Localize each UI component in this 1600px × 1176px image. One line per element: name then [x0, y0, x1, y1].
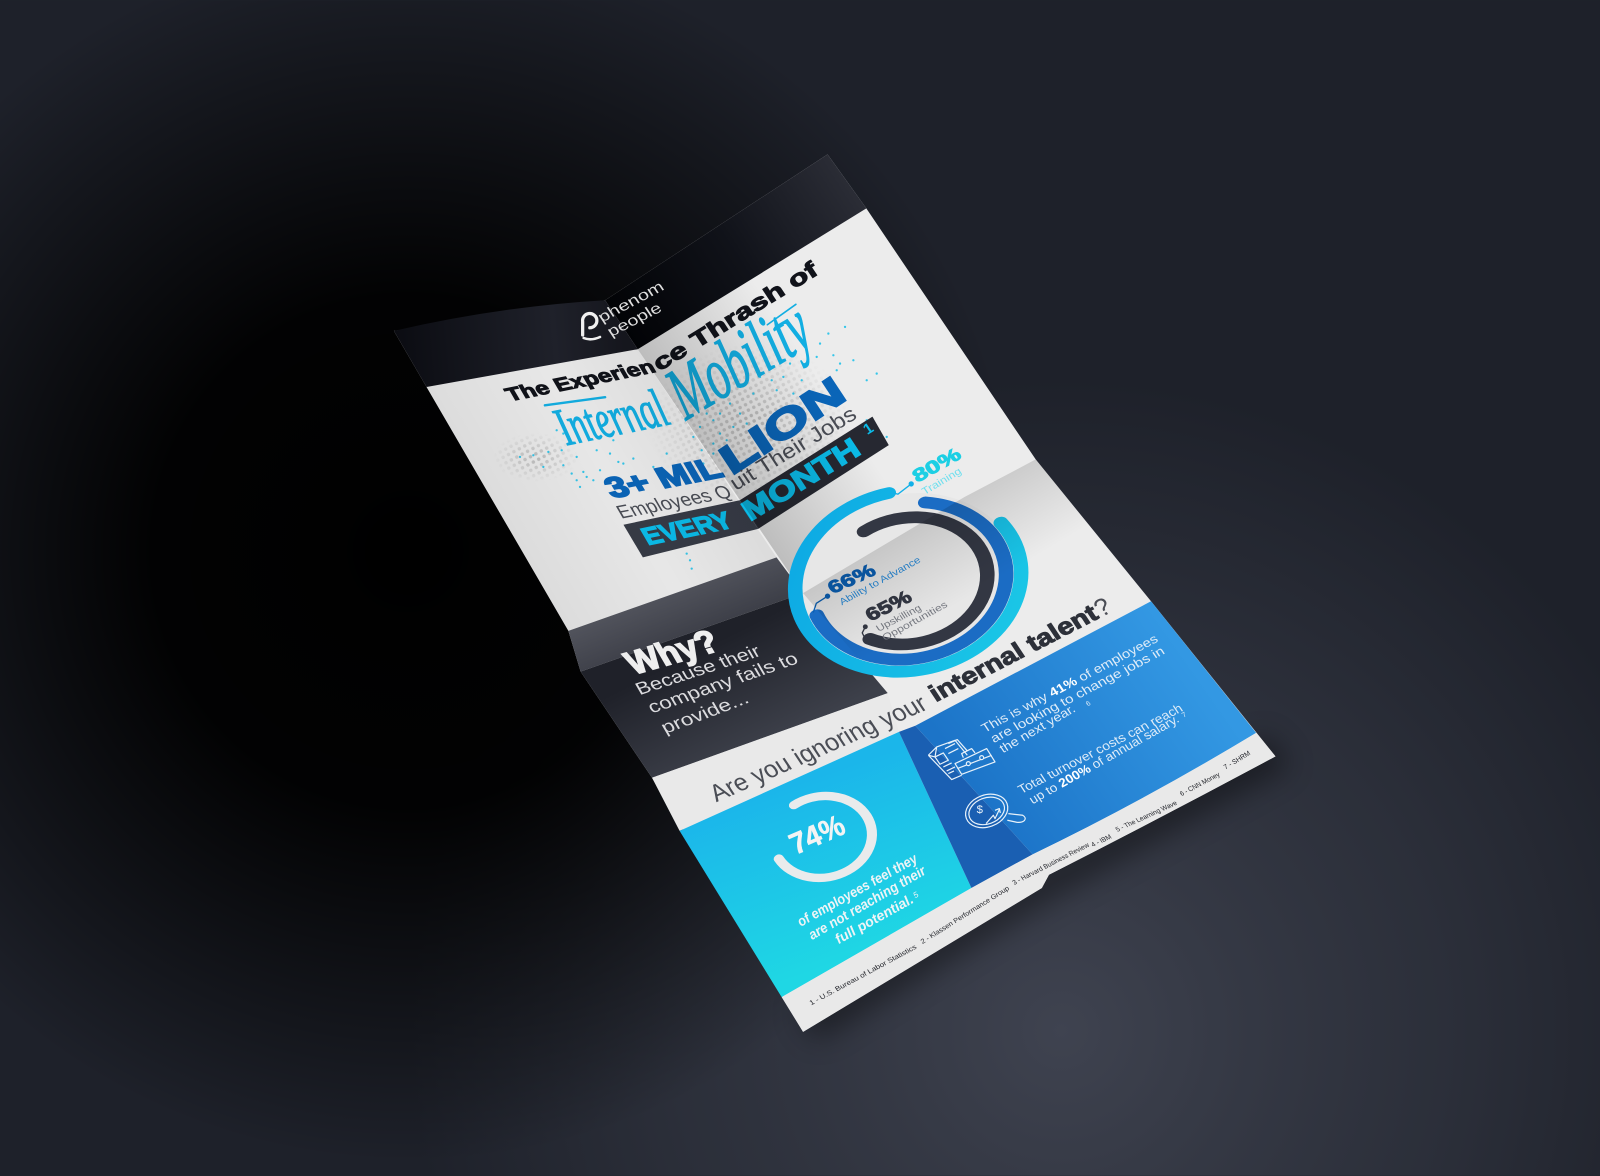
- source list: 4 - IBM: [1090, 834, 1113, 849]
- question left text: Are you ignoring your: [704, 690, 933, 807]
- source list: 6 - CNN Money: [1179, 771, 1222, 798]
- header band: right: [605, 154, 866, 349]
- source list: 5 - The Learning Wave: [1115, 800, 1179, 834]
- circular chart: [755, 443, 1061, 707]
- label training: Training: [920, 466, 964, 498]
- top-left panel shading: [427, 349, 777, 631]
- script heading: Mobility: Mobility: [652, 285, 825, 436]
- why heading: Why?: [619, 624, 726, 682]
- label ability to advance: Ability to Advance: [837, 555, 923, 608]
- stat: 3+ million left: 3+ MIL: [598, 451, 729, 504]
- fact two text: Total turnover costs can reach: [1015, 700, 1185, 797]
- folded paper flyer: [394, 154, 1276, 1032]
- fact one text: 6: [1084, 699, 1092, 708]
- logo word phenom: phenom: [595, 278, 667, 326]
- logo word people: people: [604, 300, 665, 340]
- label opportunities: Opportunities: [880, 599, 950, 644]
- 74% caption: of employees feel they: [794, 851, 922, 930]
- logo mark: [583, 314, 600, 339]
- connector lines: [813, 484, 911, 643]
- 74% caption: are not reaching their: [806, 863, 930, 943]
- why panel: [568, 557, 888, 778]
- every month banner: [623, 417, 889, 557]
- why body text: [631, 641, 802, 737]
- fact one text: are looking to change jobs in: [987, 643, 1167, 746]
- logo: [583, 278, 667, 340]
- question mark: ?: [1089, 593, 1117, 623]
- stat: 3+ million right: LION: [711, 368, 853, 483]
- 74% value: 74%: [782, 810, 852, 860]
- label 66%: 66%: [823, 560, 879, 597]
- source list: 1 - U.S. Bureau of Labor Statistics: [808, 944, 919, 1007]
- 74% caption: 5: [911, 890, 921, 900]
- question strip panel: [652, 693, 899, 831]
- footnote marker 1: 1: [860, 419, 877, 438]
- source list: 2 - Klassen Performance Group: [920, 885, 1011, 946]
- paper base: [394, 154, 1276, 1032]
- subhead left: Employees Q: [613, 482, 736, 523]
- source list: 7 - SHRM: [1223, 750, 1252, 771]
- title left part: The Experien: [502, 357, 660, 406]
- source list: 3 - Harvard Business Review: [1012, 842, 1091, 887]
- chart rings: [755, 455, 1061, 707]
- label upskilling: Upskilling: [874, 603, 924, 634]
- script heading: Internal: Internal: [541, 379, 680, 456]
- panel: dark blue wedge: [899, 726, 1033, 888]
- icon: document and briefcase: [928, 740, 995, 780]
- header band: left: [394, 300, 638, 387]
- script swash on capital I: [545, 397, 605, 405]
- source list: [808, 750, 1252, 1007]
- why body text: Because their: [631, 641, 764, 699]
- fact one text: This is why 41% of employees: [978, 631, 1161, 735]
- icon: magnifier with dollar and arrow: $: [977, 804, 984, 816]
- banner text: every: EVERY: [636, 506, 738, 550]
- subhead right: uit Their Jobs: [725, 402, 861, 495]
- script heading: Internal: [541, 379, 680, 456]
- banner text: month: MONTH: [736, 432, 866, 527]
- scattered cyan dots: [520, 327, 887, 569]
- fold shading over chart: [803, 459, 1151, 732]
- why body text: company fails to: [644, 648, 802, 717]
- 74% caption: full potential.: [832, 892, 917, 947]
- footnotes strip: [782, 733, 1276, 1032]
- question bold text: internal talent: [924, 600, 1103, 707]
- script heading: Mobility: [652, 285, 825, 436]
- why body text: provide...: [657, 687, 752, 737]
- fact two text: up to 200% of annual salary.: [1026, 711, 1182, 807]
- panel: cyan stat: [680, 732, 971, 997]
- fact two text: 7: [1180, 711, 1188, 719]
- title right part: ce Thrash of: [648, 257, 823, 376]
- panel: blue facts: [915, 601, 1256, 854]
- fact one text: the next year.: [996, 701, 1078, 756]
- label 80%: 80%: [908, 443, 965, 486]
- halftone texture: [502, 356, 834, 490]
- connector dots: [825, 481, 914, 629]
- label 65%: 65%: [861, 586, 915, 625]
- script swash on letter t: [767, 304, 796, 325]
- top-right panel shading: [638, 208, 1036, 593]
- progress ring 74%: [756, 781, 889, 893]
- icon: magnifier with dollar and arrow: [961, 788, 1025, 833]
- paper shadow: [796, 735, 1291, 1041]
